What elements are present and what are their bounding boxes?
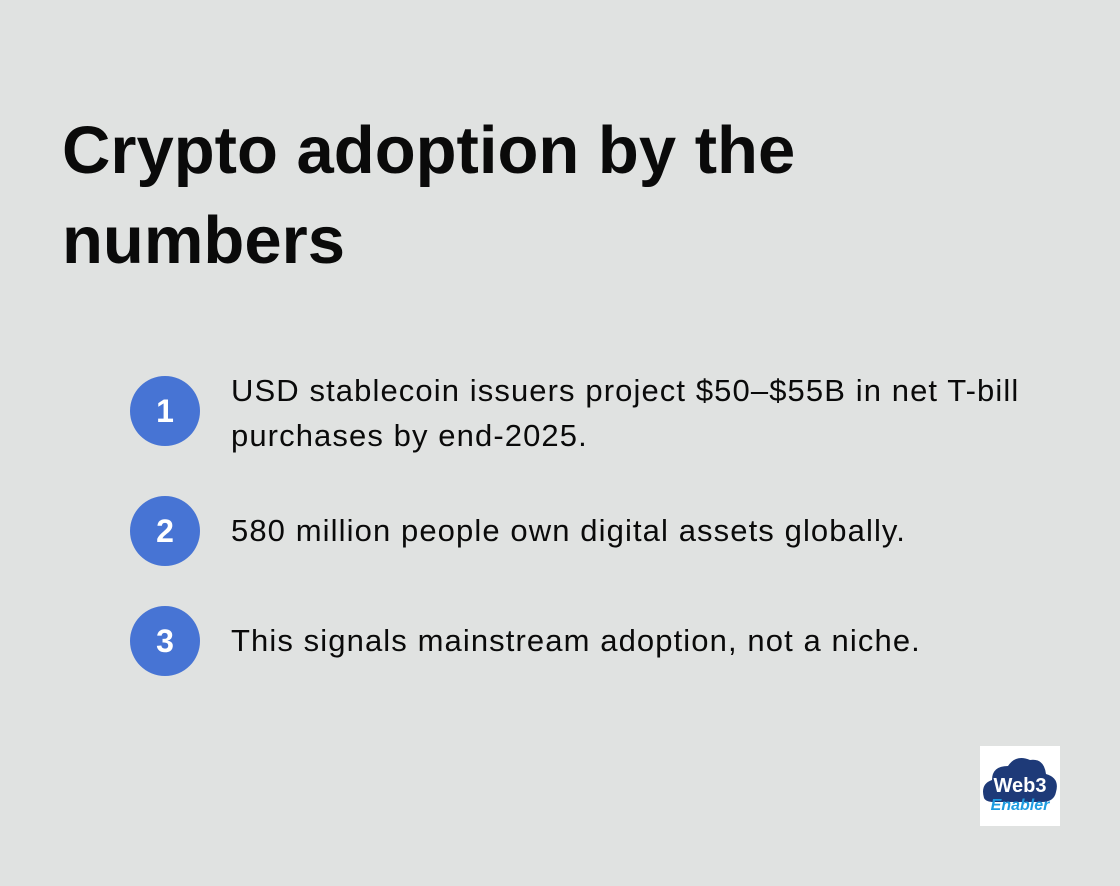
logo: Enabler [991, 797, 1050, 814]
badge 1 [130, 376, 200, 446]
badge 3 [130, 606, 200, 676]
logo [980, 746, 1060, 826]
badge 2 [130, 496, 200, 566]
title: Crypto adoption by the [62, 113, 795, 188]
badge 1: 1 [156, 393, 174, 429]
badge 3: 3 [156, 623, 174, 659]
title: numbers [62, 203, 345, 278]
logo: Web3 [994, 775, 1046, 797]
item 1 [130, 373, 1019, 453]
item 3 [130, 606, 921, 676]
badge 2: 2 [156, 513, 174, 549]
text 1: USD stablecoin issuers project $50–$55B in net T-bill purchases by end-2025. [231, 373, 1019, 453]
item 2 [130, 496, 906, 566]
text 2: 580 million people own digital assets globally. [231, 513, 906, 548]
title [62, 113, 795, 278]
text 3: This signals mainstream adoption, not a niche. [231, 623, 921, 658]
